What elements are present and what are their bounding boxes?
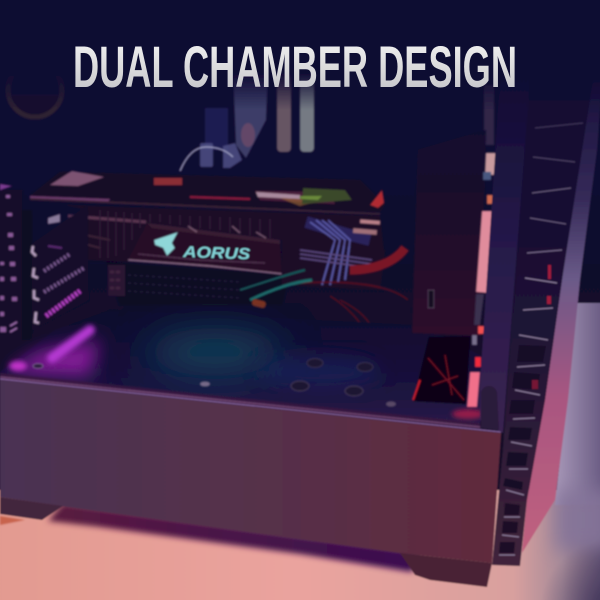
heatsink fins <box>48 205 385 262</box>
pink light strip upper <box>476 211 493 293</box>
bright floor reflection <box>9 361 27 371</box>
dual chamber partition wall <box>412 130 486 336</box>
floor front lip <box>0 373 481 430</box>
dark right corner vignette <box>530 530 600 600</box>
lower panel top highlight <box>0 379 501 432</box>
AORUS logo text: AORUS <box>182 244 251 263</box>
graphics card fans underside <box>106 262 290 305</box>
front mesh strip <box>492 80 593 566</box>
pink light strip lower <box>467 372 480 407</box>
mesh vents <box>499 345 546 553</box>
PCI expansion slots <box>22 205 88 340</box>
floor teal glow <box>145 328 285 376</box>
pink light strip small top <box>485 153 498 175</box>
case shadow on floor <box>48 503 420 572</box>
chamber floor <box>0 310 490 425</box>
floor blue glow <box>260 356 380 388</box>
mesh slats <box>499 123 583 555</box>
red glow at bottom of strip <box>452 409 484 419</box>
right side card block and power cables <box>240 220 408 335</box>
pillar hinge <box>481 386 499 430</box>
lower front panel <box>0 380 501 563</box>
case pillar <box>480 80 530 433</box>
floor screws <box>33 358 396 407</box>
wall to floor blend <box>555 490 600 550</box>
wall behind case <box>555 303 600 505</box>
white cable arc <box>180 147 233 171</box>
top fan and radiator glow <box>200 70 494 168</box>
floor magenta glow <box>8 340 100 376</box>
partition detail slot <box>428 290 434 308</box>
pink side of case <box>522 80 600 553</box>
left mesh side <box>0 184 22 340</box>
orange floor tint by left foot <box>0 516 25 525</box>
top dark gradient behind title <box>0 0 600 110</box>
graphics card top edge and backplate <box>30 171 385 214</box>
red mesh accents <box>532 265 551 389</box>
graphics card shroud <box>128 223 282 274</box>
red LEDs and strip hardware <box>472 172 502 414</box>
floor wood surface <box>0 490 600 600</box>
left foot <box>0 497 63 520</box>
AORUS eagle logo <box>154 232 178 256</box>
right foot <box>400 553 492 587</box>
connector highlights <box>251 188 384 309</box>
glowing purple tube <box>52 330 90 358</box>
cable cutout below partition <box>413 337 470 404</box>
top left yellow fan ring <box>8 63 62 117</box>
